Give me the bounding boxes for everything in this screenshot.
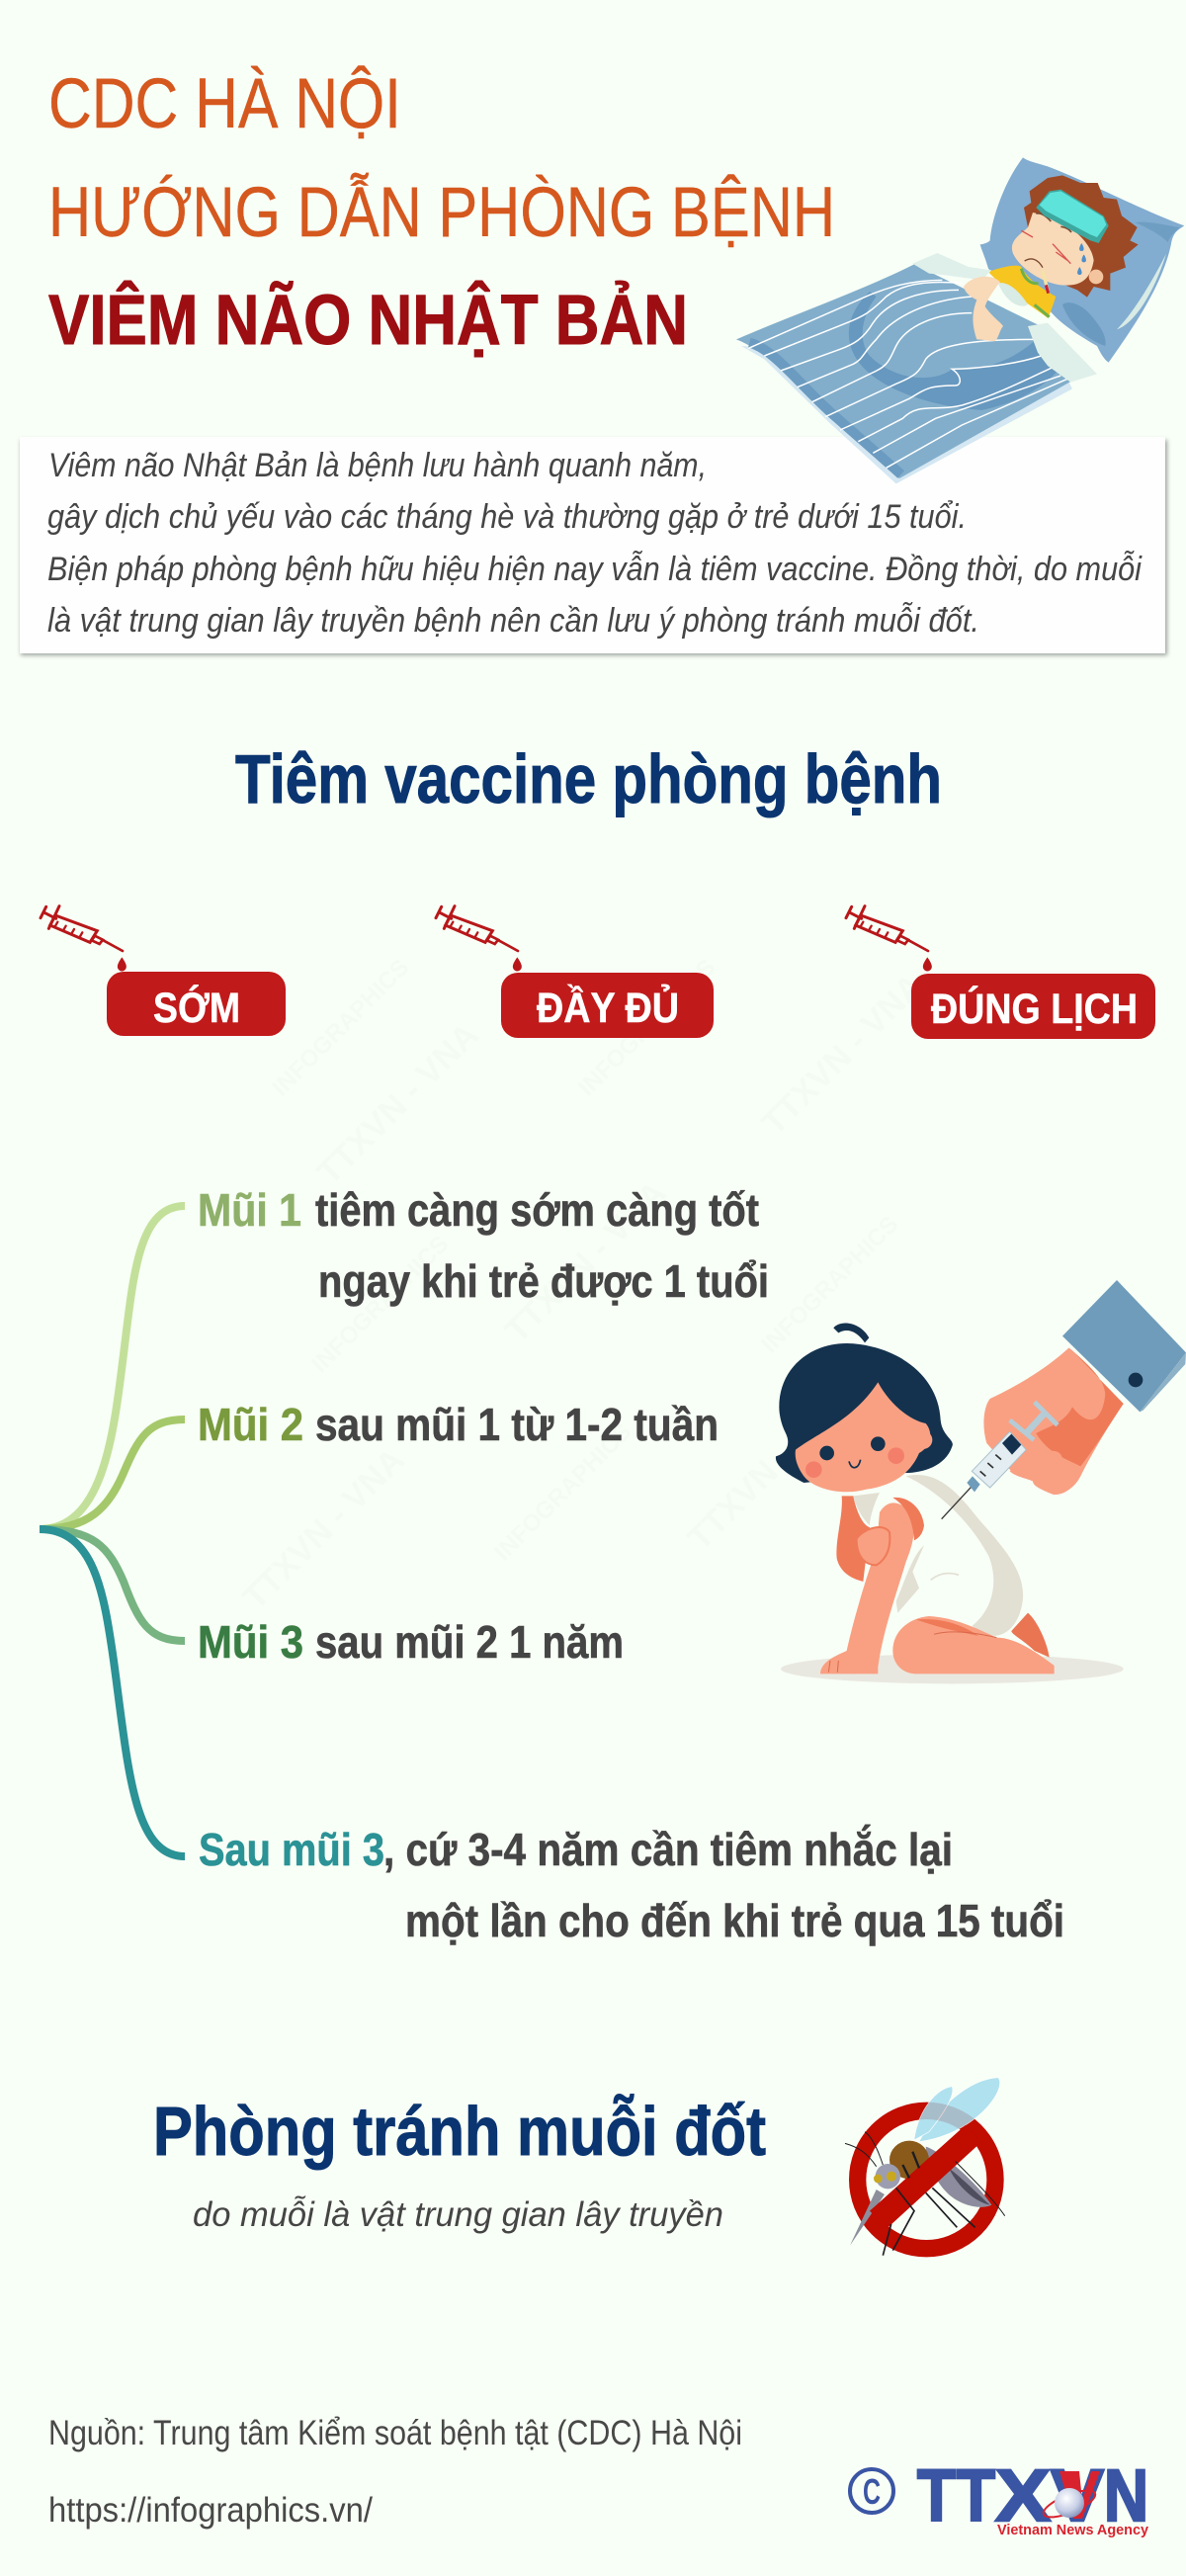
icon: syringe 2 [436,906,522,971]
badge: đúng lịch: ĐÚNG LỊCH [931,985,1138,1033]
badge: đầy đủ [501,973,714,1038]
icon: copyright: C [863,2471,881,2512]
cold pack [1036,190,1109,243]
title: VIÊM NÃO NHẬT BẢN [48,281,688,360]
shadow [781,1654,1124,1683]
blanket [736,264,1072,483]
booster: Sau mũi 3 [199,1824,384,1875]
icon: no mosquito [845,2078,1005,2256]
watermarks [236,954,931,1617]
booster: một lần cho đến khi trẻ qua 15 tuổi [405,1895,1064,1946]
face [1012,213,1103,286]
logo: TTXVN: N [1104,2454,1148,2536]
face [796,1382,932,1492]
torso side [836,1493,959,1613]
heading: mosquito prevention: Phòng tránh muỗi đốt [153,2093,766,2170]
booster [199,1824,1064,1946]
dose 1: tiêm càng sớm càng tốt [315,1184,759,1236]
hair [776,1323,953,1483]
legs and antennae [845,2132,1005,2256]
dose 1: ngay khi trẻ được 1 tuổi [318,1255,769,1307]
branching curves [40,1206,185,1856]
intro text [47,447,1143,640]
cuff [1062,1280,1186,1412]
dose 1 [198,1184,769,1307]
icon: syringe 1 [41,906,127,971]
intro text: gây dịch chủ yếu vào các tháng hè và thường gặp ở trẻ dưới 15 tuổi. [47,498,967,536]
subheading: do muỗi là vật trung gian lây truyền [193,2195,723,2234]
title: CDC HÀ NỘI [48,65,401,143]
icon: copyright [850,2469,893,2513]
prohibition bar [870,2125,981,2229]
dose 1: Mũi 1 [198,1184,301,1236]
sheet fold [912,253,1097,383]
syringe [942,1402,1058,1519]
logo: TTXVN [917,2454,1149,2538]
hair [1024,175,1139,298]
title [48,65,835,360]
panel: introduction [20,437,1167,655]
doctor hand [983,1347,1124,1495]
booster: , cứ 3-4 năm cần tiêm nhắc lại [383,1824,953,1875]
dose 3: sau mũi 2 1 năm [315,1616,624,1668]
badge: đúng lịch [911,974,1155,1039]
badge: sớm [107,972,286,1036]
fingers [1010,1443,1079,1495]
icon: sick child in bed [736,157,1184,483]
logo: TTXVN: V [1051,2454,1104,2536]
dose 3 [198,1616,624,1668]
back of garment [906,1475,1023,1636]
ring [858,2110,995,2249]
dose 2: Mũi 2 [198,1399,303,1450]
dose 3: Mũi 3 [198,1616,303,1668]
badge: sớm: SỚM [153,984,240,1032]
icon: syringe 3 [846,906,932,971]
dose 2: sau mũi 1 từ 1-2 tuần [315,1399,719,1450]
logo: TTXVN: T [917,2454,956,2536]
wings [914,2078,1000,2142]
shirt [988,266,1056,318]
intro text: là vật trung gian lây truyền bệnh nên cần lưu ý phòng tránh muỗi đốt. [47,602,979,640]
arm and hand [964,277,1028,341]
website: https://infographics.vn/ [48,2491,373,2530]
logo: TTXVN: Vietnam News Agency [997,2522,1149,2538]
title: HƯỚNG DẪN PHÒNG BỆNH [48,173,835,252]
pillow [980,157,1184,363]
logo: TTXVN: T [957,2454,995,2536]
intro text: Viêm não Nhật Bản là bệnh lưu hành quanh năm, [48,447,707,484]
foot [1011,1613,1050,1658]
logo: TTXVN: X [995,2454,1051,2536]
heading: vaccine: Tiêm vaccine phòng bệnh [235,740,942,817]
arm [820,1498,924,1674]
icon: child being vaccinated [776,1280,1186,1683]
source: Nguồn: Trung tâm Kiểm soát bệnh tật (CDC) Hà Nội [48,2414,742,2452]
mosquito body [850,2141,991,2246]
leg [892,1616,1055,1674]
badge: đầy đủ: ĐẦY ĐỦ [537,984,679,1032]
